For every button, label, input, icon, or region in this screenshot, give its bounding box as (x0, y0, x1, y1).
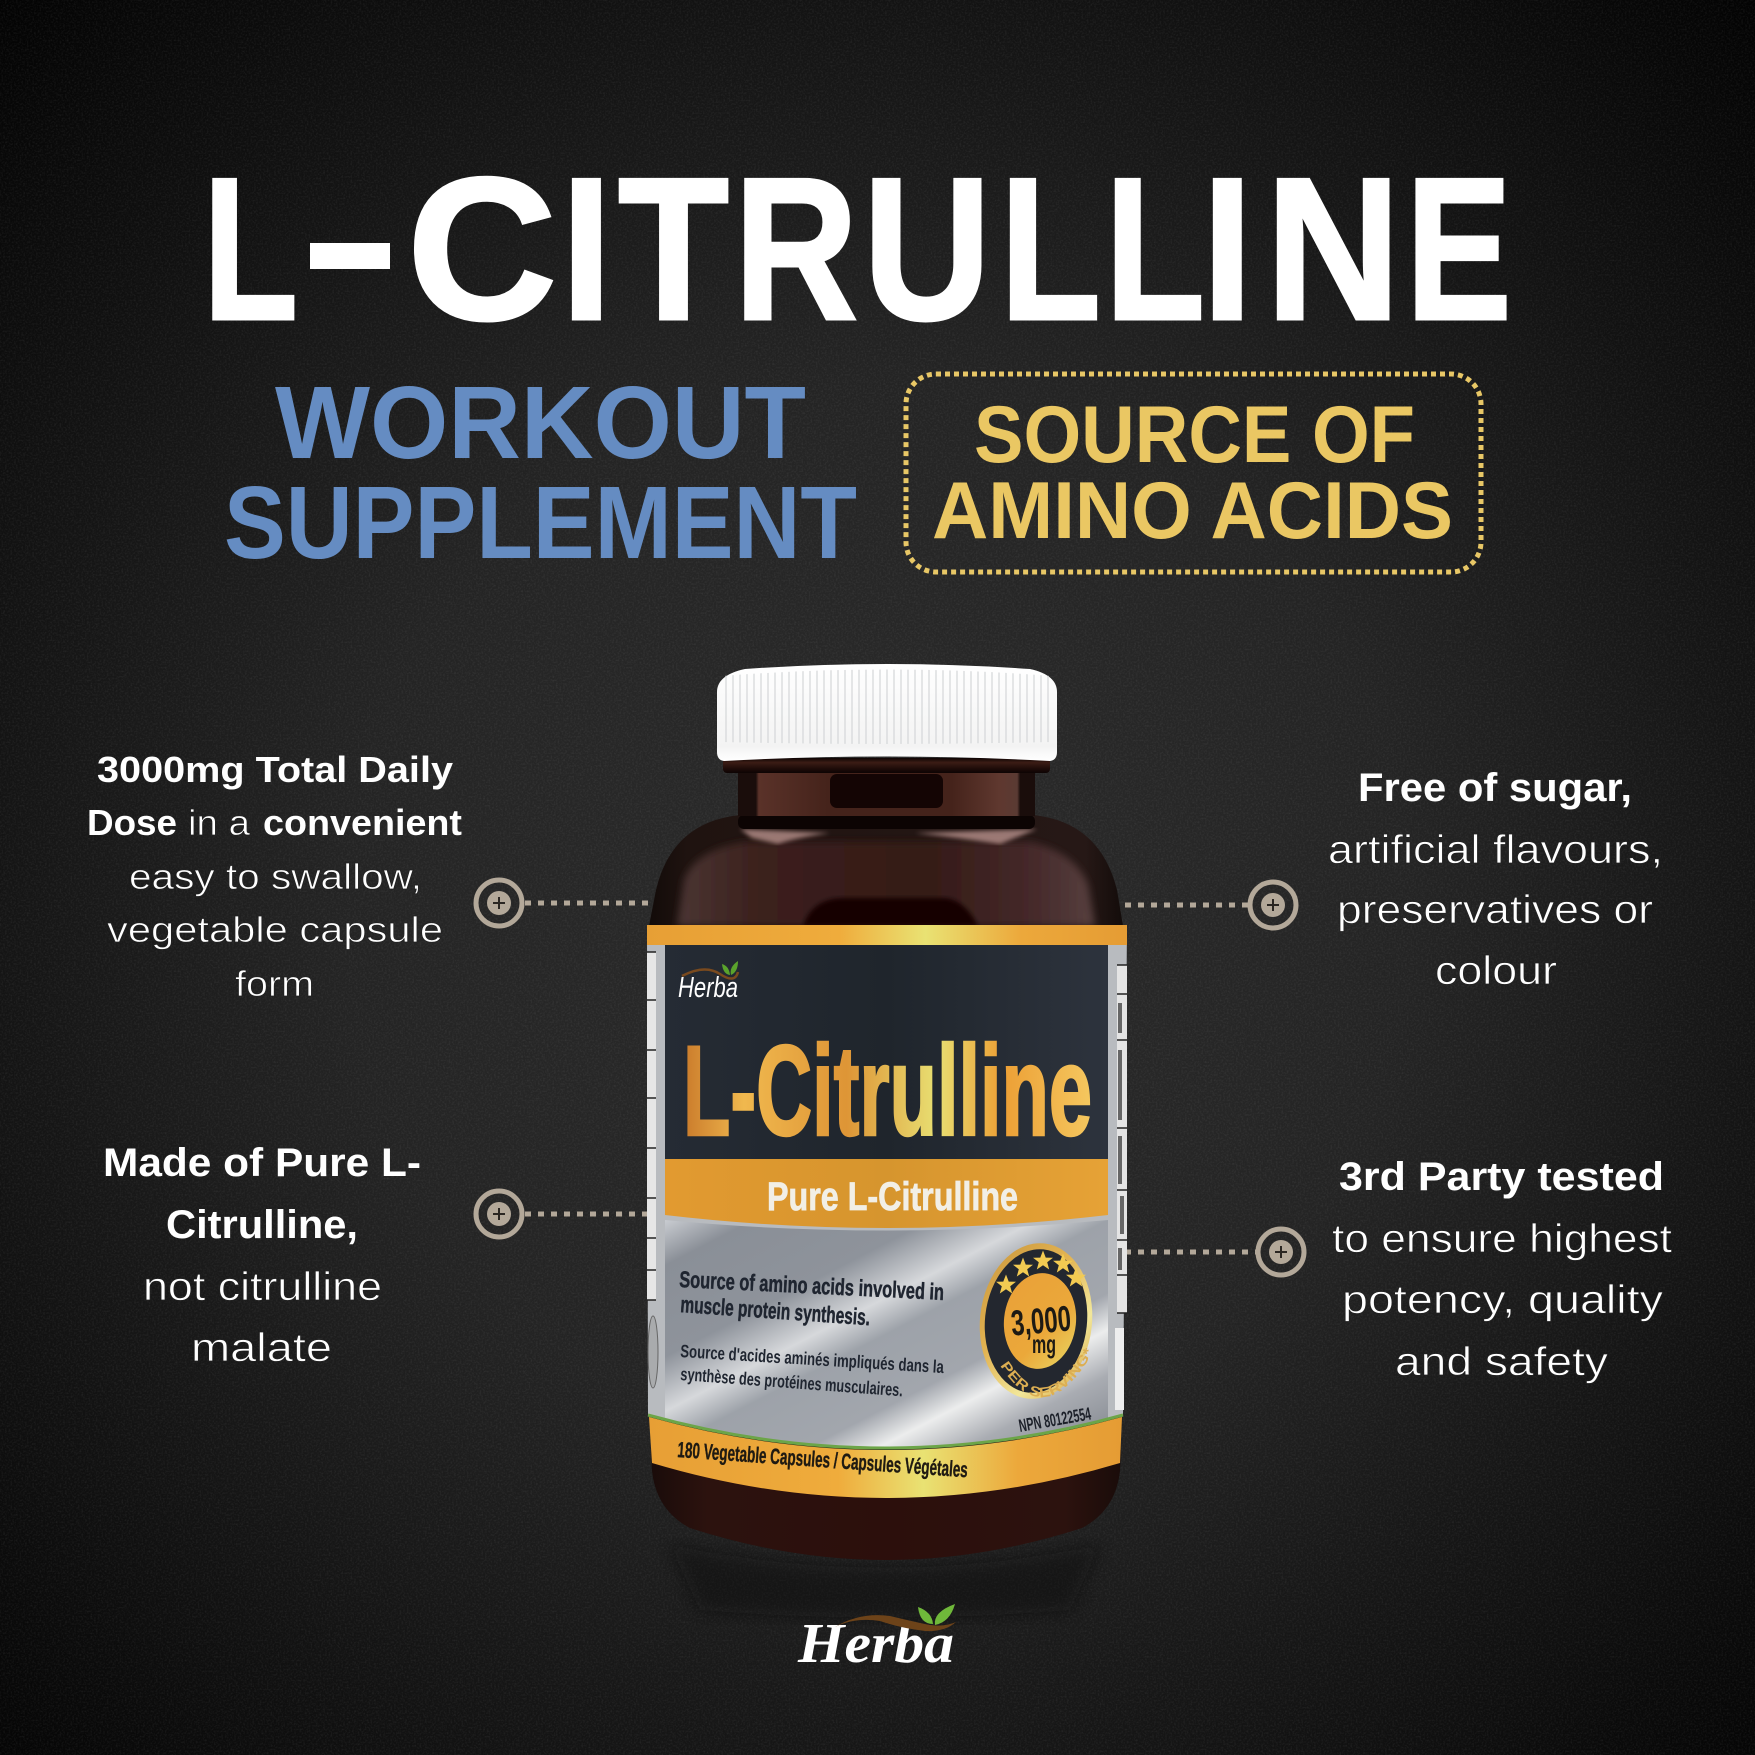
connector: pure l-citrulline (476, 1191, 650, 1237)
glass inner reflection (677, 842, 1095, 926)
text block: daily dose: 3000mg Total Daily (97, 749, 453, 790)
text block: pure l-citrulline: malate (191, 1326, 332, 1370)
bottle (647, 664, 1127, 1618)
heading: workout supplement (224, 365, 857, 580)
label silver base (647, 926, 1127, 1448)
text block: daily dose: in a (188, 802, 251, 843)
text block: third party tested: to ensure highest (1332, 1217, 1672, 1261)
bottle shadow (670, 1545, 1100, 1618)
neck dark window (830, 774, 943, 808)
rose highlight left (740, 829, 830, 844)
connector: free of sugar (1125, 882, 1296, 928)
text block: free of sugar: artificial flavours, (1328, 828, 1663, 872)
title: C (407, 136, 557, 363)
rose highlight right (915, 829, 1037, 844)
title: E (1406, 136, 1512, 363)
title: R (734, 136, 858, 363)
title: I (561, 136, 612, 363)
text block: daily dose (87, 749, 462, 1004)
title: - (305, 135, 395, 347)
top gold band (647, 925, 1127, 945)
badge: 3,000 mg: PER SERVING* (1000, 1348, 1089, 1398)
connector: third party tested (1125, 1229, 1304, 1275)
title: I (1202, 136, 1253, 363)
dark reflection (803, 898, 978, 926)
heading: workout supplement: WORKOUT (275, 365, 806, 480)
capsule count: 180 Vegetable Capsules / Capsules Végétales (677, 1437, 969, 1482)
connector: daily dose (476, 880, 650, 926)
orange band (665, 1159, 1108, 1228)
label description (679, 1266, 945, 1400)
text block: daily dose: convenient (263, 802, 462, 843)
text block: free of sugar: preservatives or (1337, 888, 1653, 932)
text block: daily dose: easy to swallow, (129, 856, 422, 897)
label (647, 925, 1127, 1498)
badge: 3,000 mg (980, 1243, 1092, 1399)
neck ridge (723, 758, 1050, 773)
text block: third party tested: potency, quality (1342, 1278, 1663, 1322)
badge: 3,000 mg: mg (1032, 1329, 1056, 1359)
text block: pure l-citrulline: not citrulline (143, 1265, 382, 1309)
logo: Herba: Herba (797, 1613, 954, 1675)
text block: free of sugar: colour (1435, 949, 1557, 993)
callout: source of amino acids: AMINO ACIDS (932, 466, 1453, 556)
text block: free of sugar: Free of sugar, (1358, 766, 1632, 810)
bottle glass (649, 815, 1123, 1560)
text block: daily dose: vegetable capsule (107, 909, 443, 950)
silver panel (665, 1220, 1108, 1448)
badge: 3,000 mg: 3,000 (1009, 1298, 1073, 1344)
small brand: Herba (678, 972, 738, 1004)
label description: synthèse des protéines musculaires. (680, 1364, 904, 1400)
title: L (1000, 136, 1101, 363)
NPN number: NPN 80122554 (1017, 1404, 1093, 1436)
text block: daily dose: Dose (87, 802, 177, 843)
text block: third party tested: 3rd Party tested (1339, 1155, 1664, 1199)
title: U (863, 136, 991, 363)
title: N (1266, 136, 1401, 363)
band text: Pure L-Citrulline (767, 1175, 1018, 1219)
text block: free of sugar (1328, 766, 1663, 993)
title: T (618, 136, 729, 363)
label product name: L-Citrulline (683, 1020, 1092, 1163)
neck shoulder band (738, 815, 1035, 829)
callout: source of amino acids: SOURCE OF (974, 390, 1415, 480)
title: L (203, 136, 298, 363)
label description: Source of amino acids involved in (679, 1266, 945, 1305)
text block: daily dose: form (235, 963, 314, 1004)
label description: Source d'acides aminés impliqués dans la (680, 1341, 945, 1377)
text block: third party tested: and safety (1395, 1340, 1608, 1384)
bottom gold band (649, 1417, 1122, 1498)
green line (648, 1415, 1123, 1448)
heading: workout supplement: SUPPLEMENT (224, 465, 857, 580)
text block: third party tested (1332, 1155, 1672, 1384)
title: L (1105, 136, 1205, 363)
callout: source of amino acids (906, 374, 1481, 572)
dark panel (665, 945, 1108, 1160)
bottle base (651, 1450, 1121, 1560)
text block: pure l-citrulline: Citrulline, (166, 1203, 358, 1247)
label description: muscle protein synthesis. (680, 1291, 871, 1330)
text block: pure l-citrulline (103, 1141, 421, 1370)
cap (717, 664, 1057, 761)
right table (1115, 965, 1127, 1410)
bottle neck (738, 772, 1035, 816)
text block: pure l-citrulline: Made of Pure L- (103, 1141, 421, 1185)
title (203, 135, 1512, 363)
small brand (678, 961, 738, 1004)
left table (647, 952, 658, 1388)
